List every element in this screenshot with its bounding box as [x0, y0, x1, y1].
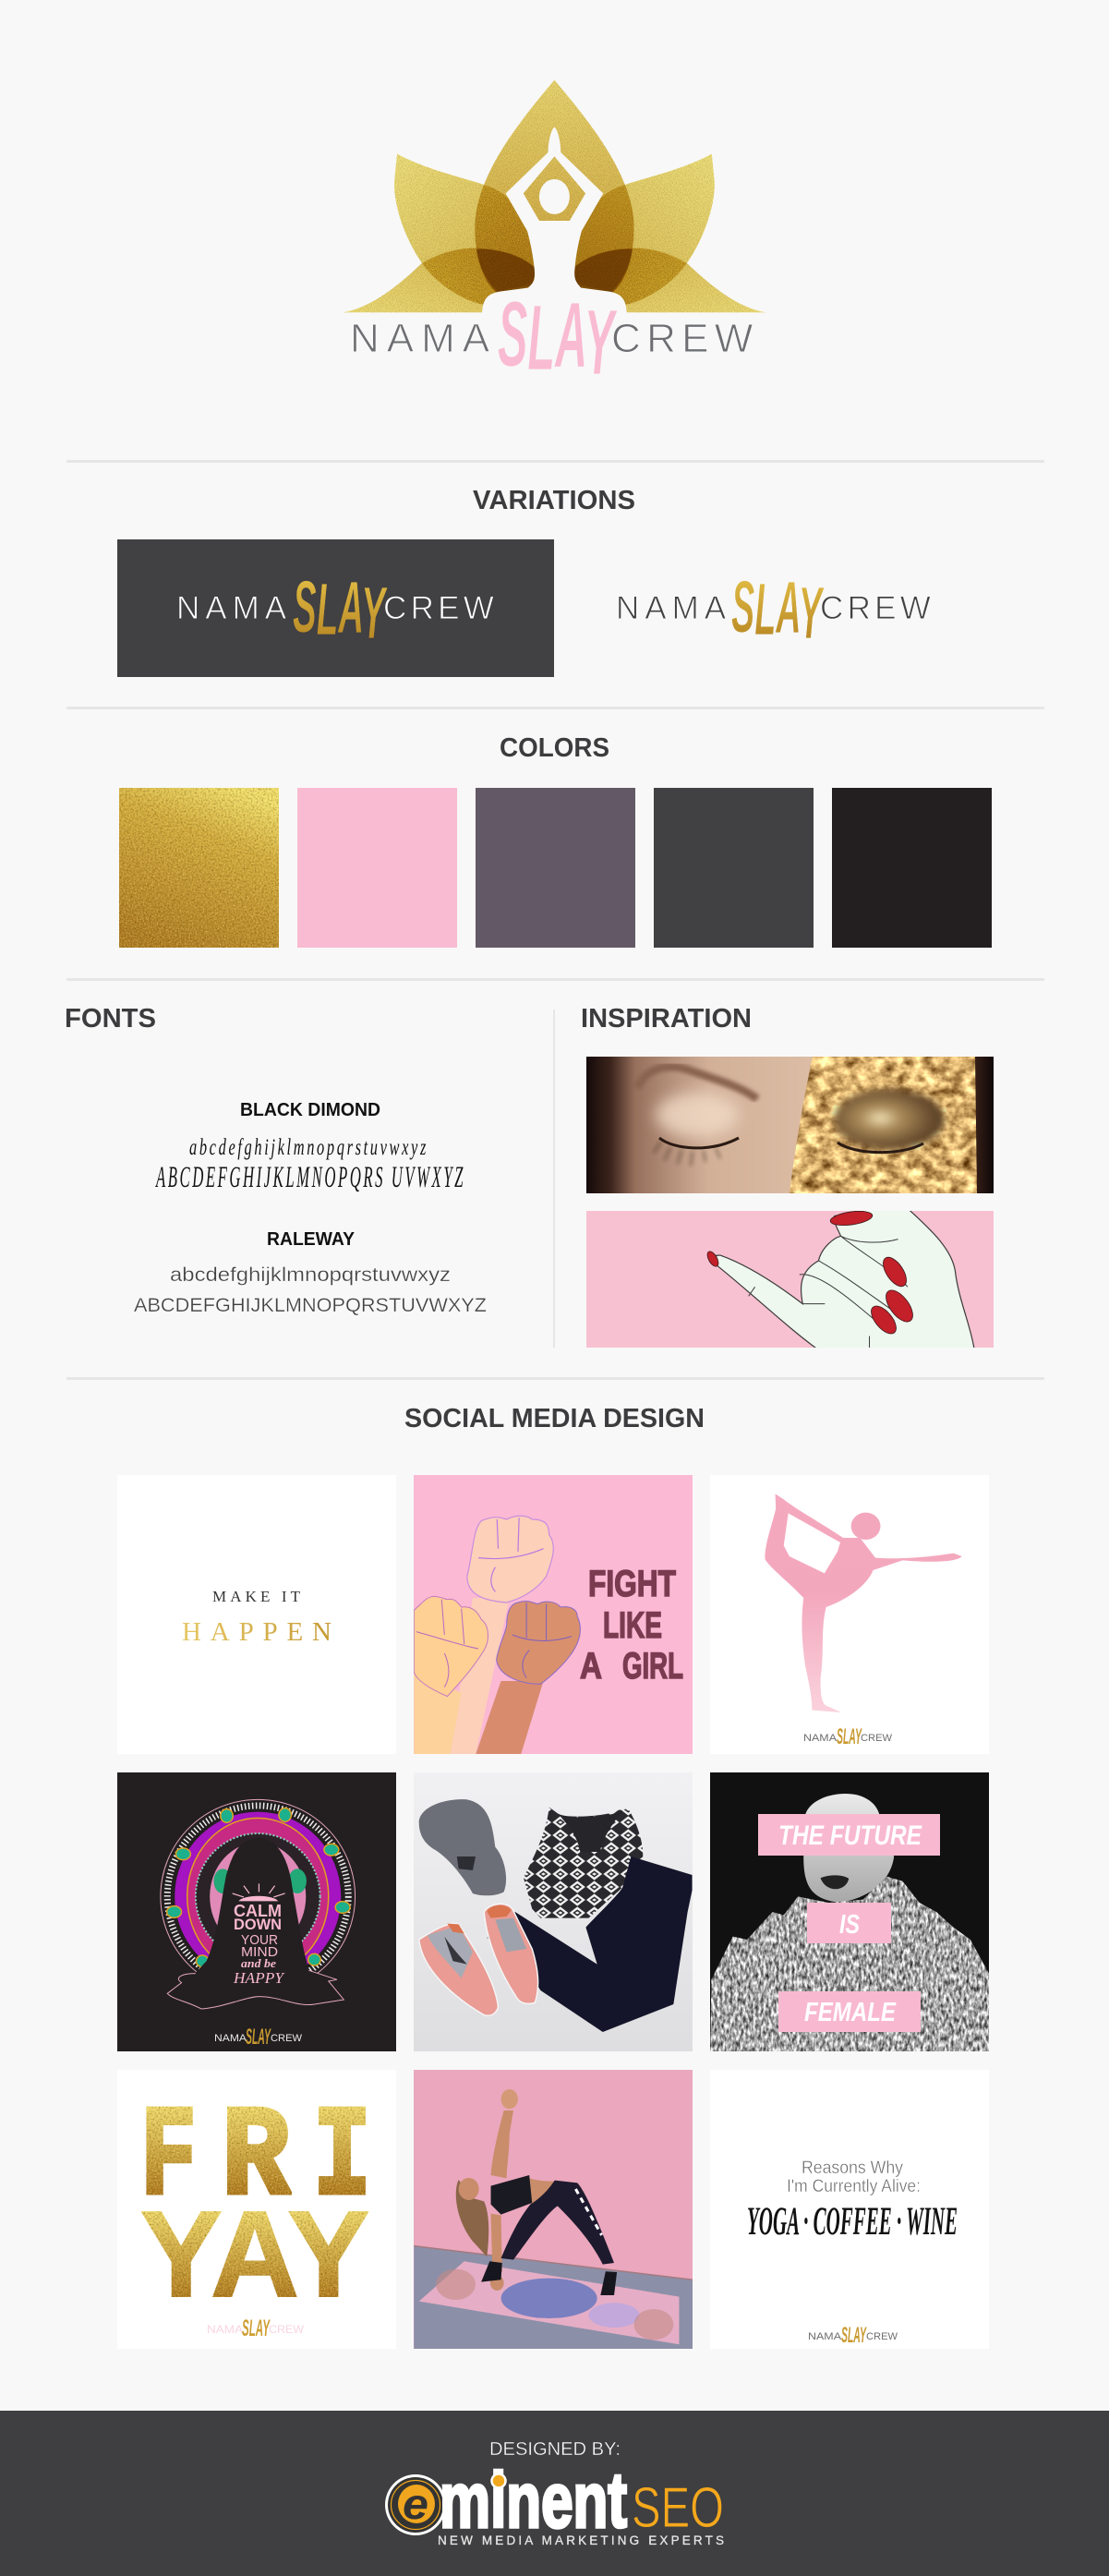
photo: woman in fur: [710, 1794, 989, 2053]
illustration: raised fists: [414, 1516, 580, 1755]
Raleway lowercase specimen: abcdefghijklmnopqrstuvwxyz: [170, 1264, 451, 1286]
small logo: [215, 2028, 302, 2044]
leggings: [487, 1856, 693, 2032]
script uppercase specimen: ABCDEFGHIJKLMNOPQRS UVWXYZ: [155, 1161, 465, 1194]
social card: workout outfit flat-lay: [414, 1772, 693, 2051]
swatch: black: [832, 788, 992, 948]
panel: dark logo variation: SLAY: [293, 565, 388, 654]
social card: calm down mandala: [117, 1772, 396, 2051]
small logo: [803, 1724, 893, 1749]
yoga mat: [419, 2261, 679, 2344]
cap: [419, 1799, 506, 1895]
icon: orange i-dot: [491, 2473, 506, 2488]
social card: reasons why: I'm Currently Alive:: [787, 2177, 921, 2196]
colour swatches: [119, 788, 992, 948]
illustration: dancer silhouette: [765, 1494, 962, 1712]
banner: the future: [758, 1814, 940, 1856]
heading: fonts: FONTS: [65, 1004, 156, 1034]
red nails: [705, 1209, 918, 1338]
small logo: CREW: [269, 2323, 305, 2336]
designed by label: DESIGNED BY:: [489, 2439, 621, 2460]
small logo: NAMA: [207, 2323, 243, 2336]
social card: make it happen: HAPPEN: [182, 1617, 331, 1647]
illustration: mandala with meditating figure: [161, 1799, 356, 2009]
panel: dark logo variation: NAMA: [176, 590, 292, 626]
panel: light logo variation: SLAY: [731, 565, 825, 654]
small logo: NAMA: [803, 1733, 838, 1744]
small logo: SLAY: [246, 2025, 271, 2050]
swatch: gold: [119, 788, 279, 948]
text: calm down your mind and be happy: [233, 1902, 285, 1987]
text: calm down your mind and be happy: YOUR: [241, 1932, 278, 1948]
heading: variations: VARIATIONS: [473, 486, 635, 515]
gold lettering: I: [313, 2087, 371, 2231]
Raleway uppercase specimen: ABCDEFGHIJKLMNOPQRSTUVWXYZ: [134, 1295, 487, 1316]
small logo: CREW: [866, 2331, 898, 2342]
sneaker left: [419, 1924, 498, 2015]
swatch: pink: [297, 788, 457, 948]
social card: watercolor dancer: [710, 1475, 989, 1754]
social card: make it happen: MAKE IT: [212, 1588, 301, 1605]
panel: font specimens: [134, 1100, 487, 1316]
wordmark: NAMA: NAMA: [350, 316, 497, 361]
panel: light logo variation: [616, 565, 934, 654]
gold lettering: R: [222, 2087, 290, 2231]
banner: female: [778, 1991, 921, 2032]
photo: gold leaf eye makeup: [586, 1057, 994, 1193]
wordmark: CREW: CREW: [611, 316, 759, 361]
panel: light logo variation: CREW: [820, 590, 934, 626]
text: fight like a girl: A: [580, 1646, 602, 1687]
font name: Raleway: RALEWAY: [267, 1229, 356, 1250]
panel: dark logo variation: [117, 539, 554, 677]
wordmark: SLAY: SLAY: [498, 283, 618, 394]
social card: yoga pose photo: [414, 2070, 693, 2351]
icon: speedometer e badge: e: [403, 2480, 428, 2528]
social card: fight like a girl: [414, 1475, 693, 1755]
Eminent SEO logo: SEO: [632, 2476, 724, 2540]
text: fight like a girl: LIKE: [603, 1605, 662, 1646]
gold lettering: YAY: [140, 2186, 369, 2322]
script lowercase specimen: abcdefghijklmnopqrstuvwxyz: [189, 1135, 428, 1160]
small logo: NAMA: [808, 2331, 842, 2342]
Eminent SEO logo: NEW MEDIA MARKETING EXPERTS: [438, 2534, 724, 2547]
social card: the future is female: [710, 1772, 989, 2053]
social card: fri yay: [117, 2070, 396, 2349]
text: calm down your mind and be happy: HAPPY: [233, 1969, 285, 1987]
gold lettering: F: [140, 2087, 197, 2231]
text: calm down your mind and be happy: DOWN: [234, 1916, 282, 1933]
social card: reasons why: [710, 2070, 989, 2349]
social card: make it happen: [117, 1475, 396, 1754]
swatch: mauve: [476, 788, 635, 948]
text: calm down your mind and be happy: CALM: [234, 1902, 282, 1920]
heading: colors: COLORS: [500, 733, 609, 763]
banner: is: IS: [839, 1910, 861, 1940]
font name: Black Dimond: BLACK DIMOND: [240, 1100, 380, 1120]
main logo: lotus with yoga figure and wordmark: [343, 80, 766, 394]
panel: dark logo variation: CREW: [383, 590, 498, 626]
small logo: [207, 2316, 305, 2341]
footer band: [0, 2411, 1109, 2576]
illustration: hand with red nails: [586, 1208, 994, 1350]
banner: is: [807, 1903, 891, 1943]
woman: [456, 2089, 617, 2295]
text: fight like a girl: [580, 1569, 683, 1679]
small logo: CREW: [271, 2033, 303, 2044]
sports bra: [524, 1808, 643, 1918]
banner: female: FEMALE: [804, 1998, 897, 2027]
text: calm down your mind and be happy: MIND: [241, 1944, 278, 1960]
sneaker right: [484, 1904, 538, 2003]
icon: gold lotus: [343, 80, 766, 317]
swatch: charcoal: [654, 788, 814, 948]
panel: light logo variation: NAMA: [616, 590, 731, 626]
heading: social media design: SOCIAL MEDIA DESIGN: [404, 1404, 705, 1433]
social card: reasons why: Reasons Why: [802, 2159, 903, 2178]
small logo: SLAY: [841, 2323, 867, 2348]
Eminent SEO logo: minent: [440, 2457, 627, 2544]
text: fight like a girl: GIRL: [622, 1646, 683, 1687]
small logo: CREW: [861, 1733, 893, 1744]
heading: inspiration: INSPIRATION: [581, 1004, 752, 1034]
small logo: SLAY: [837, 1724, 862, 1749]
text: fight like a girl: FIGHT: [588, 1564, 676, 1604]
small logo: SLAY: [242, 2316, 271, 2341]
icon: speedometer e badge: [385, 2474, 446, 2535]
ground: [414, 2246, 693, 2351]
banner: the future: THE FUTURE: [778, 1820, 922, 1851]
gold lettering: [140, 2087, 371, 2322]
small logo: [808, 2323, 898, 2348]
small logo: NAMA: [214, 2033, 247, 2044]
text: calm down your mind and be happy: and be: [241, 1956, 276, 1970]
